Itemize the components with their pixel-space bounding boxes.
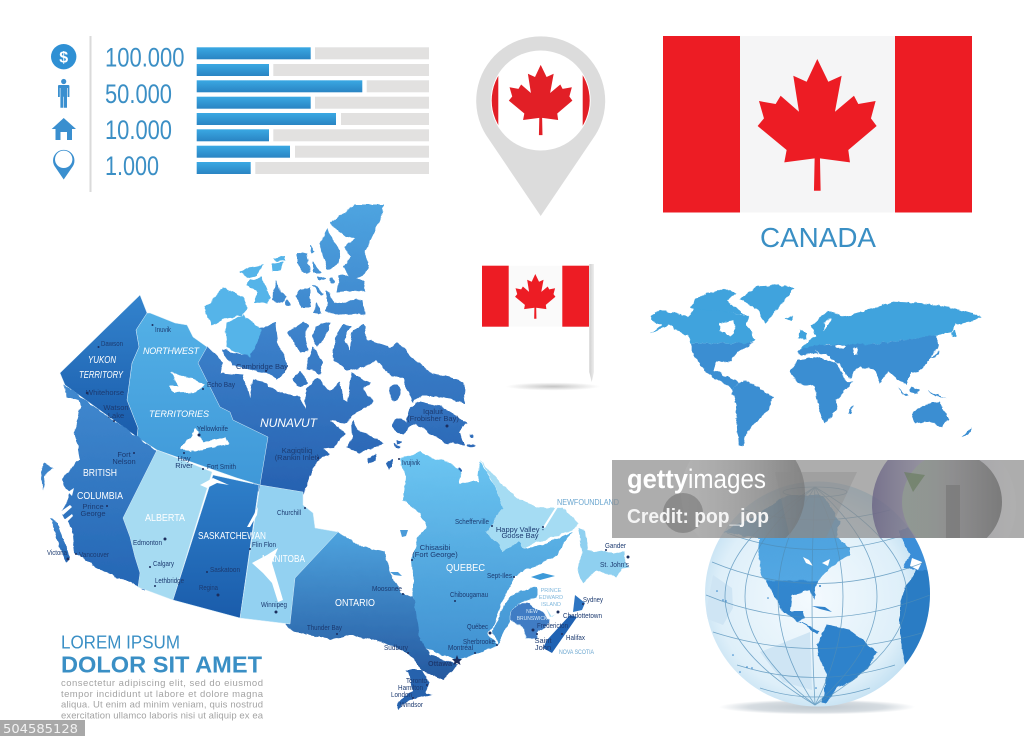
large Canadian flag <box>663 36 972 212</box>
saskatchewan <box>173 475 259 618</box>
body copy: aliqua. Ut enim ad minim veniam, quis nostrud <box>61 700 263 711</box>
region names: NOVA SCOTIA <box>559 650 594 656</box>
north america <box>723 495 850 634</box>
labrador <box>480 460 578 552</box>
prince edward island <box>546 608 563 617</box>
city names: Ivujivik <box>402 458 420 467</box>
city names: Churchill <box>277 508 301 517</box>
icon: dollar <box>51 44 76 69</box>
value labels: 100.000 <box>105 42 184 72</box>
city names: Sydney <box>583 595 603 604</box>
body copy: tempor incididunt ut labore et dolore magna <box>61 689 264 700</box>
city names: Chisasibi <box>420 543 451 552</box>
bar chart <box>197 47 429 174</box>
banner decorative circles <box>663 460 1002 538</box>
usa and central america <box>692 343 755 390</box>
icon: dollar: $ <box>59 50 68 66</box>
city names: Gander <box>605 541 626 550</box>
hudson bay <box>720 320 735 337</box>
image id tag: 504585128 <box>3 721 78 736</box>
region names: NEW <box>526 609 538 615</box>
great bear and great slave lakes <box>168 372 229 451</box>
north america <box>650 308 755 345</box>
city names: Thunder Bay <box>307 623 342 632</box>
city names <box>47 325 629 709</box>
city names: John <box>535 643 551 652</box>
icon: person <box>58 79 69 108</box>
australia <box>912 402 948 428</box>
city names: Yellowknife <box>197 424 228 433</box>
region names: ALBERTA <box>145 512 185 524</box>
city names: River <box>175 461 193 470</box>
statistics panel <box>51 36 429 192</box>
city names: Nelson <box>112 457 136 466</box>
region names: YUKON <box>88 355 117 366</box>
region names: PRINCE <box>541 588 562 594</box>
city names: Dawson <box>101 339 123 348</box>
city names: Fredericton <box>537 621 568 630</box>
arctic islands of the northwest territories <box>205 256 284 357</box>
ellesmere island <box>330 205 382 292</box>
city names: Iqaluit <box>423 407 444 416</box>
japan <box>952 330 956 338</box>
region names: TERRITORIES <box>149 409 209 419</box>
icon: location pin <box>53 150 74 180</box>
ontario <box>285 532 458 710</box>
city names: Cambridge Bay <box>236 362 288 371</box>
value labels: 10.000 <box>105 115 172 145</box>
seas <box>817 318 857 379</box>
city names: Regina <box>199 583 219 592</box>
city names: Vancouver <box>79 550 109 559</box>
city names: Montréal <box>448 643 473 652</box>
madagascar <box>847 405 853 415</box>
british columbia <box>62 385 160 590</box>
region names <box>77 346 619 656</box>
body copy <box>61 678 264 721</box>
city names: Schefferville <box>455 517 489 526</box>
city names: George <box>80 509 106 518</box>
small flag on pole <box>482 264 600 390</box>
city names: Ottawa <box>428 659 453 668</box>
region names: BRITISH <box>83 467 117 479</box>
city markers <box>66 324 630 699</box>
eurasia north <box>798 302 983 352</box>
greenland <box>740 284 795 325</box>
globe grid lines <box>706 487 930 705</box>
value labels <box>105 42 184 181</box>
value labels: 50.000 <box>105 79 172 109</box>
heading line one: LOREM IPSUM <box>61 632 180 652</box>
victoria island east <box>223 323 288 380</box>
city names: Sudbury <box>384 643 408 652</box>
iceland <box>785 317 793 321</box>
map of Canada <box>41 205 630 710</box>
britain <box>798 330 807 340</box>
heading line two: DOLOR SIT AMET <box>61 652 262 678</box>
nova scotia <box>543 615 577 653</box>
region names: NEWFOUNDLAND <box>557 497 619 507</box>
city names: (Rankin Inlet) <box>275 453 320 462</box>
nunavut <box>195 205 474 496</box>
africa and europe <box>899 569 930 664</box>
anticosti island <box>531 573 555 580</box>
region names: BRUNSWICK <box>517 616 548 622</box>
region names: MANITOBA <box>262 553 305 565</box>
city names: Flin Flon <box>252 540 276 549</box>
arctic islands <box>690 288 747 316</box>
city names: Happy Valley - <box>496 525 545 534</box>
city names: Québec <box>467 622 488 631</box>
city names: Hay <box>177 454 191 463</box>
text block <box>61 632 264 721</box>
watermark banner <box>612 460 1024 538</box>
credit line: Credit: pop_jop <box>627 506 769 528</box>
body copy: exercitation ullamco laboris nisi ut aliquip ex ea <box>61 710 264 721</box>
mainland <box>195 347 372 496</box>
city names: Winnipeg <box>261 600 287 609</box>
city names: St. John's <box>600 560 629 569</box>
city names: Sept-Iles <box>487 571 512 580</box>
city names: Echo Bay <box>207 380 235 389</box>
globe <box>705 482 940 714</box>
body copy: consectetur adipiscing elit, sed do eiusmod <box>61 678 263 689</box>
lakes <box>200 478 558 602</box>
region names: QUEBEC <box>446 562 485 574</box>
hudson bay islands <box>400 530 408 537</box>
cape breton <box>573 595 585 612</box>
city names: Lake <box>108 411 124 420</box>
great lakes and caribbean <box>803 557 922 570</box>
south america <box>817 625 877 703</box>
city names: London <box>391 690 412 699</box>
map pin with flag <box>476 36 605 216</box>
island of newfoundland <box>578 528 630 583</box>
region names: NUNAVUT <box>260 416 319 430</box>
world map <box>650 284 983 447</box>
city names: Chibougamau <box>450 590 488 599</box>
city names: Calgary <box>153 559 174 568</box>
manitoba <box>240 485 338 624</box>
city names: (Fort George) <box>412 550 458 559</box>
cumberland peninsula <box>407 402 467 445</box>
city names: Toronto <box>406 676 427 685</box>
vancouver island <box>50 518 70 562</box>
city names: Prince <box>82 502 104 511</box>
quebec <box>400 452 572 660</box>
getty logo text: getty <box>627 464 688 494</box>
yukon <box>60 295 147 437</box>
city names: Charlottetown <box>563 611 602 620</box>
city names: Edmonton <box>133 538 162 547</box>
city names: Whitehorse <box>86 388 124 397</box>
baffin island <box>333 325 465 403</box>
divider line <box>90 36 92 192</box>
africa <box>790 357 853 423</box>
city names: Sherbrooke <box>463 637 495 646</box>
region names: COLUMBIA <box>77 490 123 502</box>
new zealand <box>962 427 972 437</box>
city names: Goose Bay <box>501 531 539 540</box>
southampton island <box>348 422 383 453</box>
pale far-side land <box>705 575 812 690</box>
city names: Moosonee <box>372 584 402 593</box>
getty logo text: images <box>688 464 766 494</box>
city names: Watson <box>103 403 129 412</box>
city names: Kagiqtiliq <box>282 446 312 455</box>
coastal fjords <box>60 488 74 523</box>
city names: Fort <box>117 450 132 459</box>
globe shadow <box>719 700 915 714</box>
alberta <box>123 450 212 600</box>
haida gwaii <box>41 463 53 490</box>
city names: Victoria <box>47 548 68 557</box>
region names: EDWARD <box>539 595 563 601</box>
city names: Saskatoon <box>210 565 240 574</box>
city names: Halifax <box>566 633 585 642</box>
south america <box>732 380 773 447</box>
northwest territories <box>127 313 268 485</box>
region names: TERRITORY <box>79 370 124 381</box>
region names: NORTHWEST <box>143 346 200 356</box>
city names: Windsor <box>400 700 423 709</box>
region names: ONTARIO <box>335 597 375 609</box>
value labels: 1.000 <box>105 151 159 181</box>
new brunswick <box>510 603 550 640</box>
city names: Fort Smith <box>207 462 236 471</box>
country name: CANADA <box>760 222 876 253</box>
eurasia south <box>798 335 939 385</box>
region names: ISLAND <box>541 602 561 608</box>
city names: Hamilton <box>398 683 423 692</box>
icon: house <box>52 118 76 140</box>
city names: Saint <box>534 636 552 645</box>
city names: (Frobisher Bay) <box>407 414 459 423</box>
region names: SASKATCHEWAN <box>198 530 266 542</box>
city names: Lethbridge <box>155 576 184 585</box>
city names: Inuvik <box>155 325 171 334</box>
indonesia <box>897 387 910 397</box>
